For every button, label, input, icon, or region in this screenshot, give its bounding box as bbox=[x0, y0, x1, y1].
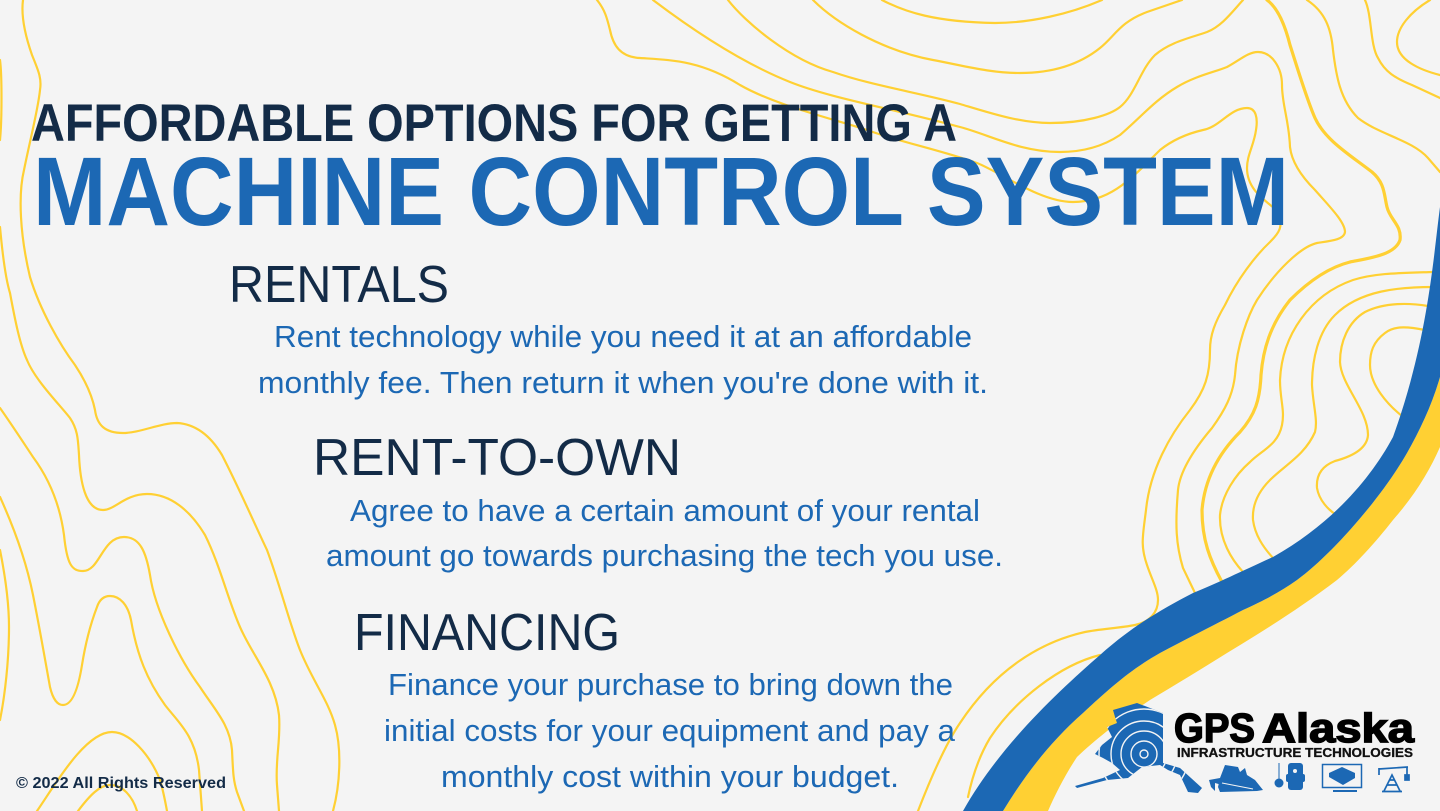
title: MACHINE CONTROL SYSTEM bbox=[33, 137, 1289, 246]
logo: GPS Alaska bbox=[1075, 703, 1415, 799]
title bbox=[31, 94, 1289, 246]
panel: rent-to-own: amount go towards purchasing the tech you use. bbox=[326, 538, 1003, 573]
icon: oil pumpjack bbox=[1379, 767, 1409, 792]
blue swoosh band bbox=[963, 207, 1440, 811]
icon: monitor with site model bbox=[1322, 764, 1362, 792]
panel: rentals: Rent technology while you need it at an affordable bbox=[274, 319, 972, 354]
panel: financing: monthly cost within your budget. bbox=[441, 759, 899, 794]
panel: rent-to-own: RENT-TO-OWN bbox=[313, 429, 681, 487]
panel: rentals bbox=[229, 256, 988, 400]
panel: financing bbox=[354, 604, 956, 794]
yellow swoosh band bbox=[1003, 377, 1440, 811]
icon: total station bbox=[1274, 763, 1305, 790]
panel: rentals: monthly fee. Then return it when you're done with it. bbox=[258, 365, 988, 400]
panel: rent-to-own bbox=[313, 429, 1003, 573]
panel: rentals: RENTALS bbox=[229, 256, 449, 314]
logo tagline: INFRASTRUCTURE TECHNOLOGIES bbox=[1177, 746, 1413, 760]
logo wordmark: GPS bbox=[1174, 705, 1255, 751]
copyright notice: © 2022 All Rights Reserved bbox=[16, 775, 226, 792]
panel: rent-to-own: Agree to have a certain amount of your rental bbox=[350, 493, 980, 528]
panel: financing: FINANCING bbox=[354, 604, 620, 662]
panel: financing: initial costs for your equipment and pay a bbox=[384, 713, 956, 748]
panel: financing: Finance your purchase to bring down the bbox=[388, 667, 953, 702]
title: AFFORDABLE OPTIONS FOR GETTING A bbox=[31, 94, 957, 153]
logo wordmark bbox=[1174, 705, 1415, 751]
logo wordmark: Alaska bbox=[1262, 705, 1415, 751]
icon: Alaska map with rings bbox=[1075, 703, 1202, 799]
icon: bulldozer bbox=[1209, 765, 1263, 792]
